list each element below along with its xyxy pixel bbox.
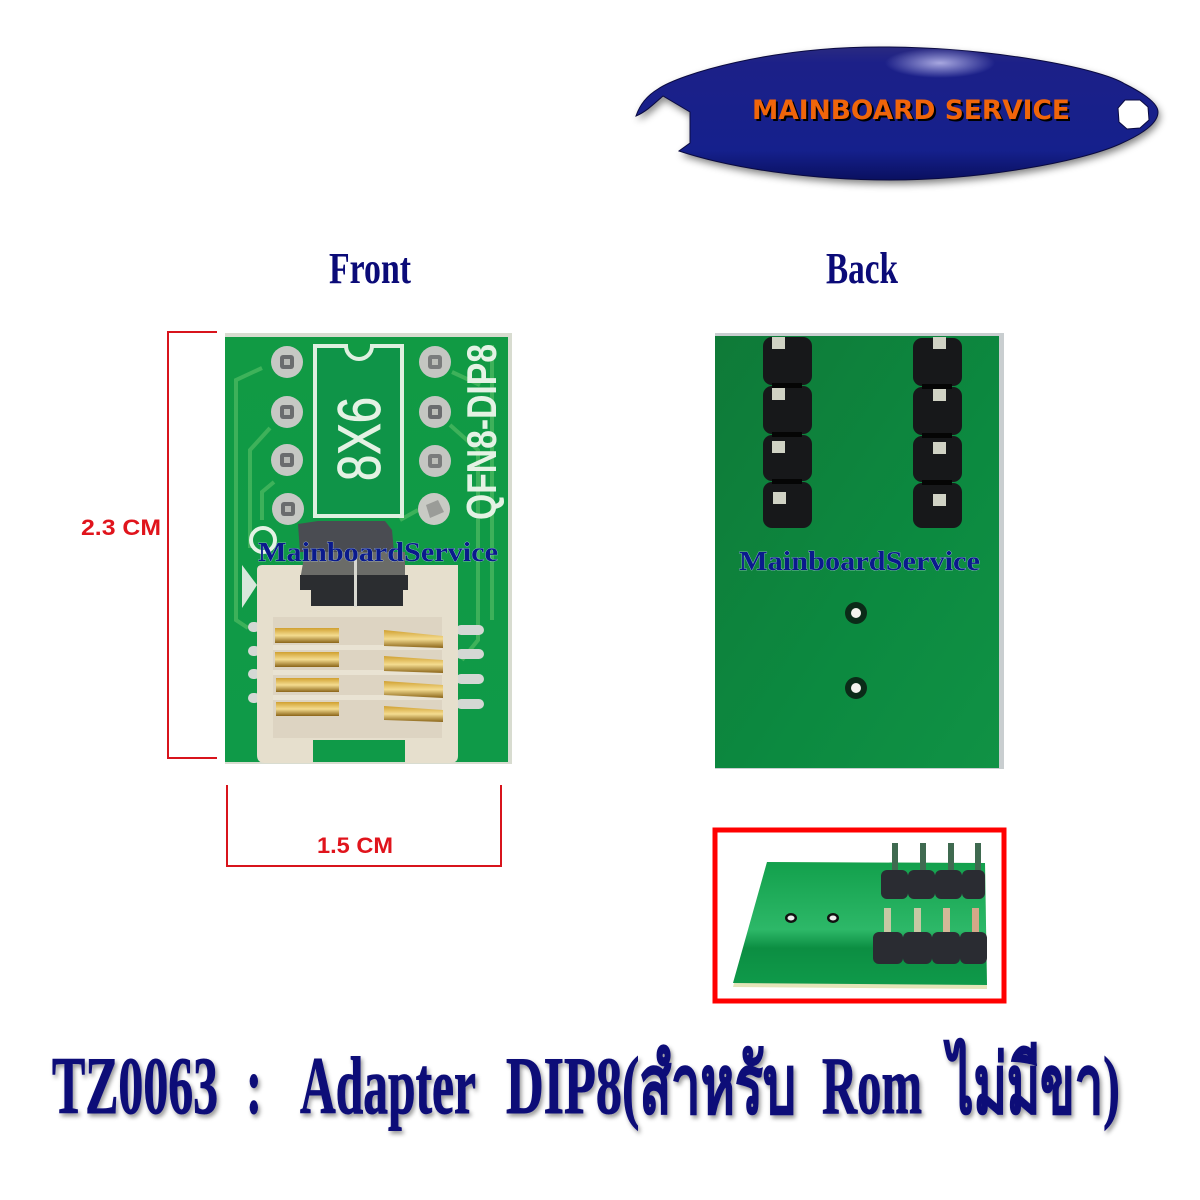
logo hole (1118, 100, 1149, 129)
title: TZ0063 (52, 1040, 218, 1131)
pads: left row (271, 346, 304, 525)
socket inner cavity (273, 617, 442, 738)
title: Adapter (300, 1040, 476, 1131)
title: DIP8(สำหรับ (506, 1040, 796, 1131)
title (52, 1038, 1120, 1131)
logo text: MAINBOARD SERVICE (754, 97, 1072, 128)
dimension: height 2.3 CM (81, 332, 217, 758)
gold contacts: left (275, 628, 339, 716)
title: : (246, 1040, 262, 1131)
silkscreen triangle marker (242, 565, 257, 608)
pin header left (763, 337, 812, 528)
silkscreen label 8X6: 8X6 (326, 397, 393, 481)
socket rails (273, 645, 442, 700)
side solder pads (248, 622, 484, 709)
pads: right row (418, 346, 451, 525)
dimension: height 2.3 CM: 2.3 CM (81, 515, 161, 540)
top pins and header (881, 843, 985, 899)
panel: back adapter board (715, 333, 1004, 769)
gold contacts: right (384, 630, 443, 722)
board traces (236, 345, 492, 660)
silkscreen label QFN8-DIP8: QFN8-DIP8 (458, 344, 505, 520)
title: Rom (822, 1040, 922, 1131)
watermark: MainboardService (739, 546, 980, 576)
silkscreen circle marker (251, 528, 275, 552)
holes (785, 913, 839, 923)
socket body (257, 565, 458, 763)
pin header right (913, 337, 962, 528)
through holes (845, 602, 867, 699)
socket black clip (298, 521, 408, 607)
dimension: width 1.5 CM: 1.5 CM (317, 833, 393, 858)
watermark: MainboardService (258, 537, 498, 567)
bottom pins and header (873, 908, 987, 964)
silkscreen chip outline (315, 346, 402, 516)
dimension: width 1.5 CM (227, 785, 501, 866)
logo: Mainboard Service badge (636, 47, 1160, 184)
heading: Front: Front (329, 244, 411, 293)
logo text: MAINBOARD SERVICE (752, 95, 1070, 126)
panel: side view photo in red frame (715, 830, 1004, 1001)
heading: Back: Back (826, 244, 898, 293)
panel: front adapter board (225, 333, 512, 764)
angled board (733, 862, 987, 989)
